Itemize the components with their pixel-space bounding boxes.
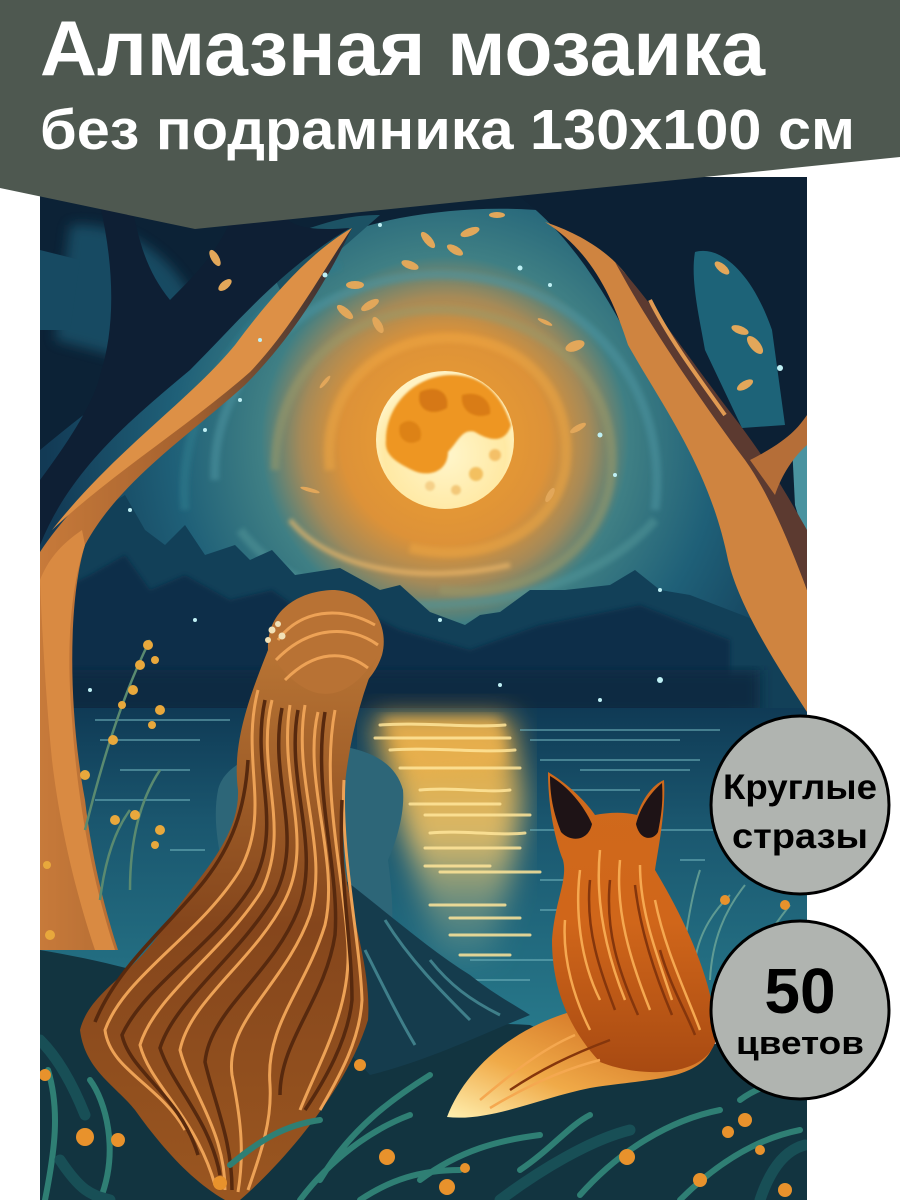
girl's dress (216, 745, 530, 1075)
leaves and fireflies (88, 212, 783, 702)
night sky (40, 208, 751, 625)
right tree (536, 210, 807, 712)
badge: 50 colours: 50 (764, 955, 836, 1027)
orange flowers (39, 895, 792, 1197)
fox (447, 772, 716, 1118)
moon reflection (95, 718, 720, 980)
girl's head (268, 590, 384, 701)
badge: round rhinestones (711, 716, 889, 894)
header banner (0, 0, 900, 229)
badge: 50 colours (711, 921, 889, 1099)
lake (40, 708, 807, 1028)
long hair (80, 613, 378, 1200)
moon (376, 371, 514, 509)
title: Алмазная мозаика (40, 4, 766, 92)
canopy (40, 196, 536, 450)
badge: round rhinestones: Круглые (723, 768, 877, 807)
right grass (686, 870, 791, 980)
grass bank (40, 950, 807, 1200)
distant forest (72, 495, 761, 708)
painting: girl and fox watching the moon (39, 177, 807, 1200)
left tree (40, 190, 352, 950)
left wildflowers (43, 640, 165, 940)
subtitle: без подрамника 130х100 см (40, 98, 855, 162)
foreground leaves (40, 1040, 805, 1200)
badge: 50 colours: цветов (736, 1025, 864, 1061)
badge: round rhinestones: стразы (732, 817, 868, 856)
moon swirl (184, 265, 657, 605)
